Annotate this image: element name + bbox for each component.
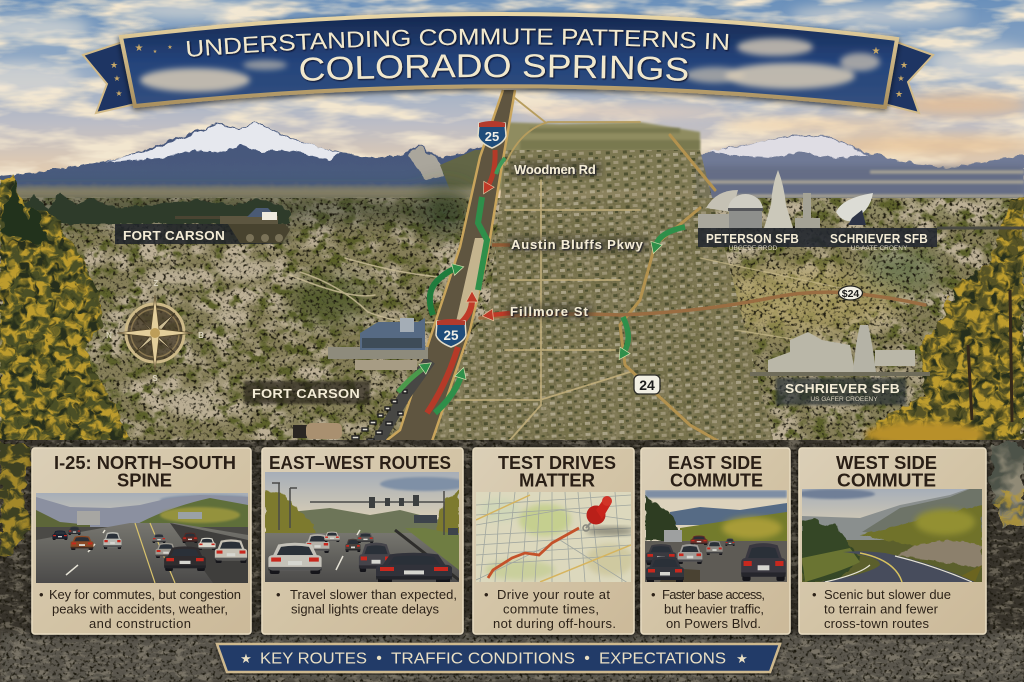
ribbon stars: ★ (110, 60, 118, 70)
shield: lower I-25: 25 (443, 328, 459, 343)
ribbon stars: ★ (897, 74, 905, 83)
highway: I-25 corridor (375, 90, 515, 447)
panel body text: • (39, 587, 44, 602)
label: Peterson SFB: PETERSON SFB (706, 231, 799, 246)
arrow: green lower I-25 (435, 376, 461, 413)
arrow: red toward interchange (462, 300, 472, 322)
ribbon clouds (140, 38, 880, 92)
label: Schriever subtitle: US AATE CROENY (851, 245, 908, 252)
title line 1: UNDERSTANDING COMMUTE PATTERNS IN (186, 28, 730, 58)
arrow: red lower I-25 (427, 347, 458, 413)
mountains: left range (0, 122, 490, 200)
panel heading line 2: MATTER (519, 470, 595, 490)
panel card (32, 448, 251, 634)
panel body text: cross-town routes (824, 616, 930, 631)
label band (698, 228, 937, 247)
landscape terrain (0, 190, 1024, 450)
mountains: right range (695, 135, 1024, 214)
banner text: TRAFFIC CONDITIONS (391, 650, 575, 668)
panel image: scenic west side road (795, 484, 982, 582)
panel body text: Drive your route at (497, 587, 610, 602)
panel body text: Scenic but slower due (824, 587, 951, 602)
icon: tank (175, 216, 290, 243)
panel heading: TEST DRIVES (498, 453, 616, 473)
compass rose: N (106, 331, 112, 340)
panel body text: Faster base access, (662, 587, 765, 602)
compass rose: Z (154, 279, 159, 288)
title line 2: COLORADO SPRINGS (300, 54, 690, 83)
road label: Woodmen Rd: Woodmen Rd (514, 162, 596, 177)
local roads (290, 95, 925, 445)
icon: utility stacks (795, 193, 820, 228)
panel body text: Key for commutes, but congestion (49, 587, 241, 602)
panel body text: • (651, 587, 656, 602)
panel body text (39, 587, 241, 631)
label: Peterson subtitle: UBGEDE RROD (729, 245, 777, 252)
truck at bottom of map (293, 423, 342, 439)
icon: house (247, 208, 277, 220)
compass rose (106, 279, 204, 383)
ribbon stars: ★ (135, 43, 144, 54)
panel heading line 2: SPINE (117, 470, 172, 490)
shield: US 24 south: 24 (639, 377, 655, 393)
landmark: Schriever SFB lower (750, 325, 930, 405)
facility beside I-25 (328, 318, 428, 370)
ribbon stars: ★ (900, 60, 908, 70)
right edge trees (860, 195, 1024, 450)
banner text: EXPECTATIONS (599, 650, 726, 668)
ground (0, 440, 1024, 682)
distant tree line (0, 190, 290, 224)
label: Schriever SFB: SCHRIEVER SFB (830, 231, 928, 246)
panel: East-West Routes (262, 448, 470, 634)
traffic on service road (352, 390, 407, 442)
panel body text: on Powers Blvd. (666, 616, 761, 631)
panel image: base road traffic (645, 490, 787, 583)
ribbon stars: ★ (167, 44, 173, 51)
panel heading: EAST–WEST ROUTES (269, 453, 451, 473)
panel card (799, 448, 986, 634)
label text: FORT CARSON (252, 386, 360, 401)
arrow: green curve west of I-25 (430, 269, 455, 315)
panel body text: peaks with accidents, weather, (52, 602, 228, 616)
arrow: Woodmen green (496, 158, 505, 174)
route arrows on the map (398, 150, 685, 413)
panel body text: • (812, 587, 817, 602)
panel heading: I-25: NORTH–SOUTH (54, 453, 236, 473)
panel heading line 2: COMMUTE (837, 470, 936, 490)
shield: upper I-25: 25 (485, 129, 499, 144)
panel body text (484, 587, 616, 631)
panel image: highway congestion (36, 493, 260, 583)
ribbon stars: ★ (872, 46, 881, 57)
panel body text: • (276, 587, 281, 602)
banner text: ★ (240, 651, 252, 666)
panel image: road map with pin (476, 492, 634, 585)
arrow: red southbound near shield (488, 150, 495, 186)
panel card (641, 448, 790, 634)
city blocks (420, 150, 775, 447)
shield: US 24 east (838, 286, 862, 300)
panel: West Side Commute (795, 448, 986, 634)
icon: satellite dish (836, 193, 873, 225)
compass rose: B (198, 331, 204, 340)
banner text: KEY ROUTES (260, 650, 367, 668)
label band (115, 224, 293, 244)
arrow: Fillmore red (491, 313, 510, 315)
ribbon stars: ★ (153, 49, 158, 55)
left edge trees (0, 174, 131, 440)
icon: base buildings (768, 332, 915, 372)
arrow: green from Fort Carson (398, 368, 424, 392)
panel body text (651, 587, 765, 631)
panel: Test Drives Matter (473, 448, 634, 634)
landmark: Fort Carson lower (244, 381, 370, 404)
panel body text: but heavier traffic, (664, 602, 764, 616)
arrow: Austin Bluffs (492, 243, 510, 247)
right ribbon tail (880, 38, 933, 113)
shield: upper I-25 (478, 121, 506, 148)
panel body text: • (484, 587, 489, 602)
shield: US 24 east: $24 (842, 288, 859, 300)
compass rose: S (152, 374, 158, 383)
ribbon stars: ★ (895, 89, 903, 99)
shield: US 24 south (634, 375, 660, 394)
label: Schriever SFB: SCHRIEVER SFB (785, 381, 900, 396)
shield: lower I-25 (436, 319, 466, 347)
label: subtitle: US GAFER CROEENY (810, 396, 878, 403)
title ribbon (82, 10, 935, 115)
panel: East Side Commute (641, 448, 790, 634)
banner text (240, 650, 748, 668)
ribbon body (121, 14, 897, 107)
panel body text: signal lights create delays (291, 602, 440, 616)
panel body text (812, 587, 951, 631)
panel heading line 2: COMMUTE (670, 470, 763, 490)
panel body text: not during off-hours. (493, 616, 616, 631)
banner shape (217, 644, 780, 672)
ribbon stars: ★ (113, 74, 121, 83)
footer banner (217, 644, 780, 672)
panel heading: WEST SIDE (836, 453, 937, 473)
banner text: ★ (736, 651, 748, 666)
arrow: east green lower (623, 317, 628, 352)
panel body text: Travel slower than expected, (290, 587, 457, 602)
label band (776, 378, 906, 405)
plains beyond the highway (495, 122, 700, 190)
landmark: Fort Carson upper (115, 208, 293, 244)
icon: spire (853, 325, 876, 372)
background: sky with clouds (0, 0, 1024, 200)
panel heading: EAST SIDE (668, 453, 762, 473)
landmark: Peterson and Schriever bases (698, 170, 1024, 252)
road label: Austin Bluffs Pkwy: Austin Bluffs Pkwy (511, 237, 644, 252)
banner text: • (376, 650, 382, 667)
panel body text: and construction (89, 616, 191, 631)
arrow: east green upper (656, 227, 685, 245)
arrow: green I-25 upper (478, 197, 487, 290)
icon: dome buildings (698, 190, 763, 228)
ribbon stars: ★ (115, 89, 123, 98)
ribbon stars (110, 43, 908, 99)
left ribbon tail (83, 38, 140, 113)
banner text: • (584, 650, 590, 667)
label band (244, 381, 370, 404)
icon: rocket tower (764, 170, 793, 228)
panel body text: to terrain and fewer (824, 602, 939, 616)
panel body text: commute times, (503, 602, 599, 616)
panel card (473, 448, 634, 634)
panel body text (276, 587, 457, 616)
label text: FORT CARSON (123, 228, 225, 243)
panel card (262, 448, 463, 634)
panel image: signals and traffic (265, 472, 470, 583)
panel: I-25 North-South Spine (32, 448, 260, 634)
road label: Fillmore St: Fillmore St (510, 304, 588, 319)
